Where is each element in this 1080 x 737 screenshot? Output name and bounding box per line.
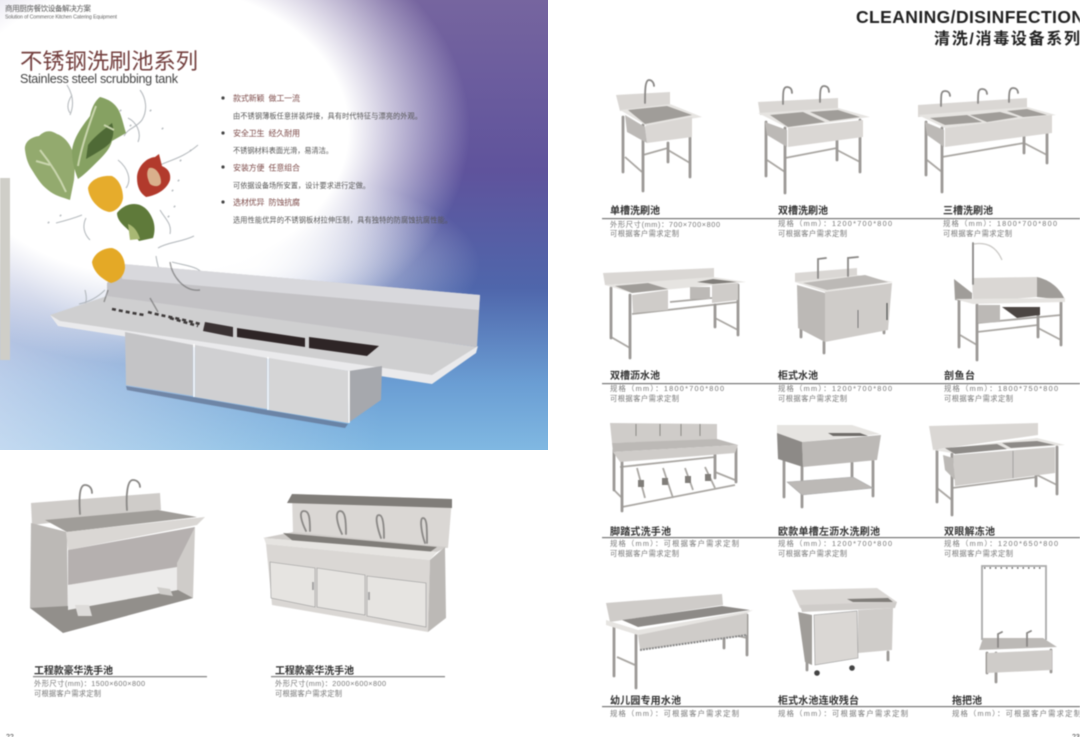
feature 1: 款式新颖 做工一流: [233, 93, 300, 103]
feature 2: [221, 128, 333, 155]
caption: double drain sink: [610, 369, 724, 403]
captions row 1: [602, 204, 1080, 238]
product: cabinet sink with scrap cart: [792, 588, 897, 676]
icon: broccoli: [117, 204, 154, 241]
product: foot-pedal hand-wash sink: [610, 423, 738, 511]
caption: double-basin sink: 规格（mm）：1200*700*800: [778, 219, 892, 228]
product: double drain sink: [603, 268, 746, 358]
dark splash on worktop: [112, 309, 200, 326]
panel: hero gradient background: [0, 0, 548, 450]
splash over counter: [104, 262, 200, 312]
feature 4: 选材优异 防蚀抗腐: [233, 197, 300, 207]
section heading: cleaning / disinfection: CLEANING/DISINFECTION: [856, 7, 1080, 27]
caption A: [33, 664, 207, 698]
product: double-basin sink: [758, 86, 870, 193]
caption: mop sink: 拖把池: [952, 694, 982, 707]
caption: fish-processing table: [944, 369, 1058, 403]
product: double basin defrosting sink: [929, 423, 1065, 515]
product: kindergarten sink: [606, 594, 753, 688]
caption: cabinet sink with scrap cart: [778, 694, 908, 718]
caption A: 工程款豪华洗手池: [34, 664, 113, 677]
caption: kindergarten sink: 规格（mm）：可根据客户需求定制: [610, 709, 739, 718]
icon: yellow pepper: [88, 176, 123, 212]
caption: cabinet sink with scrap cart: 规格（mm）：可根据客户需求定制: [778, 709, 908, 718]
cabinet doors: [125, 332, 193, 396]
feature 3: [221, 162, 370, 190]
feature 4: [221, 197, 452, 224]
caption: double drain sink: 规格（mm）：1800*700*800: [610, 384, 724, 393]
caption: mop sink: 规格（mm）：可根据客户需求定制: [952, 709, 1080, 718]
feature 3: 可依据设备场所安置，设计要求进行定做。: [233, 181, 370, 190]
caption: cabinet sink: [778, 369, 892, 403]
caption: European single basin sink: [778, 525, 892, 558]
icon: red pepper: [137, 154, 170, 197]
caption B: 工程款豪华洗手池: [275, 664, 354, 677]
captions row 2: [602, 369, 1080, 403]
caption: European single basin sink: 可根据客户需求定制: [778, 549, 847, 558]
water splash: [48, 85, 204, 308]
running header: 商用厨房餐饮设备解决方案: [5, 3, 91, 13]
title: stainless steel scrubbing tank series: Stainless steel scrubbing tank: [20, 72, 179, 86]
product: engineering luxury hand-wash sink B: [263, 494, 452, 632]
caption: double drain sink: 可根据客户需求定制: [610, 394, 679, 403]
caption: triple-basin sink: 规格（mm）：1800*700*800: [943, 219, 1057, 228]
feature 1: [221, 93, 422, 120]
basin openings: [203, 322, 233, 337]
caption: foot-pedal hand-wash sink: 脚踏式洗手池: [610, 525, 671, 538]
caption: cabinet sink with scrap cart: 柜式水池连收残台: [778, 694, 859, 707]
caption: fish-processing table: 剖鱼台: [944, 369, 975, 382]
running header: Solution of Commerce Kitchen Catering Equipment: [5, 14, 118, 20]
caption: single-basin sink: 可根据客户需求定制: [610, 229, 679, 238]
product: triple-basin sink: [918, 88, 1056, 192]
caption: foot-pedal hand-wash sink: 规格（mm）：可根据客户需求定制: [610, 539, 739, 548]
caption: cabinet sink: 柜式水池: [778, 369, 818, 382]
caption: fish-processing table: 规格（mm）：1800*750*800: [944, 384, 1058, 393]
caption: European single basin sink: 欧款单槽左沥水洗刷池: [778, 525, 880, 538]
illustration: large three-basin counter sink: [50, 264, 480, 428]
product: engineering luxury hand-wash sink A: [30, 480, 205, 633]
product: mop sink with rack: [979, 566, 1057, 682]
caption: defrosting sink: [944, 525, 1058, 558]
captions row 3: [602, 525, 1080, 558]
side tab: [0, 178, 10, 360]
caption: triple-basin sink: 三槽洗刷池: [943, 204, 993, 217]
caption: kindergarten sink: [610, 694, 739, 718]
caption: cabinet sink: 规格（mm）：1200*700*800: [778, 384, 892, 393]
caption B: 外形尺寸(mm)：2000×600×800: [275, 679, 386, 688]
product: cabinet sink: [795, 257, 893, 353]
caption: triple-basin sink: [943, 204, 1057, 238]
caption: cabinet sink: 可根据客户需求定制: [778, 394, 847, 403]
caption: double-basin sink: 双槽洗刷池: [778, 204, 828, 217]
caption: fish-processing table: 可根据客户需求定制: [944, 394, 1013, 403]
section heading: cleaning / disinfection: [856, 7, 1080, 48]
running header: [5, 3, 118, 20]
caption: defrosting sink: 可根据客户需求定制: [944, 549, 1013, 558]
caption: defrosting sink: 双眼解冻池: [944, 525, 995, 538]
caption: kindergarten sink: 幼儿园专用水池: [610, 694, 681, 707]
product: single-basin sink: [616, 80, 702, 191]
caption: foot-pedal hand-wash sink: 可根据客户需求定制: [610, 549, 679, 558]
icon: falling yellow pepper: [92, 248, 125, 283]
icon: lettuce: [25, 97, 126, 200]
product: European single basin sink with left drainboard: [777, 425, 881, 507]
feature 1: 由不锈钢薄板任意拼装焊接，具有时代特征与漂亮的外观。: [233, 112, 422, 120]
caption B: [271, 664, 445, 698]
caption: double drain sink: 双槽沥水池: [610, 369, 660, 382]
caption A: 可根据客户需求定制: [34, 689, 101, 698]
worktop: [50, 296, 477, 376]
feature 3: 安装方便 任意组合: [233, 162, 300, 172]
caption: defrosting sink: 规格（mm）：1200*650*800: [944, 539, 1058, 548]
captions row 4: [602, 694, 1080, 718]
feature 2: 不锈钢材料表面光滑，易清洁。: [233, 146, 333, 155]
caption B: 可根据客户需求定制: [275, 689, 342, 698]
section heading: cleaning / disinfection: 清洗/消毒设备系列: [934, 29, 1080, 48]
product: fish-processing table: [954, 243, 1065, 360]
caption: double-basin sink: 可根据客户需求定制: [778, 229, 847, 238]
caption: double-basin sink: [778, 204, 892, 238]
caption: foot-pedal hand-wash sink: [610, 525, 739, 558]
backsplash: [107, 264, 480, 347]
caption A: 外形尺寸(mm)：1500×600×800: [34, 679, 145, 688]
caption: triple-basin sink: 可根据客户需求定制: [943, 229, 1012, 238]
caption: single-basin sink: 单槽洗刷池: [610, 204, 660, 217]
feature 4: 选用性能优异的不锈钢板材拉伸压制，具有独特的防腐蚀抗腐性能。: [233, 216, 452, 224]
feature 2: 安全卫生 经久耐用: [233, 128, 300, 138]
feature list: [221, 93, 452, 224]
caption: single-basin sink: 外形尺寸(mm)：700×700×800: [610, 220, 720, 229]
caption: mop sink: [952, 694, 1080, 718]
caption: European single basin sink: 规格（mm）：1200*700*800: [778, 539, 892, 548]
caption: single-basin sink: [610, 204, 720, 238]
title: stainless steel scrubbing tank series: 不锈钢洗刷池系列: [20, 49, 198, 74]
title: stainless steel scrubbing tank series: [20, 49, 198, 86]
